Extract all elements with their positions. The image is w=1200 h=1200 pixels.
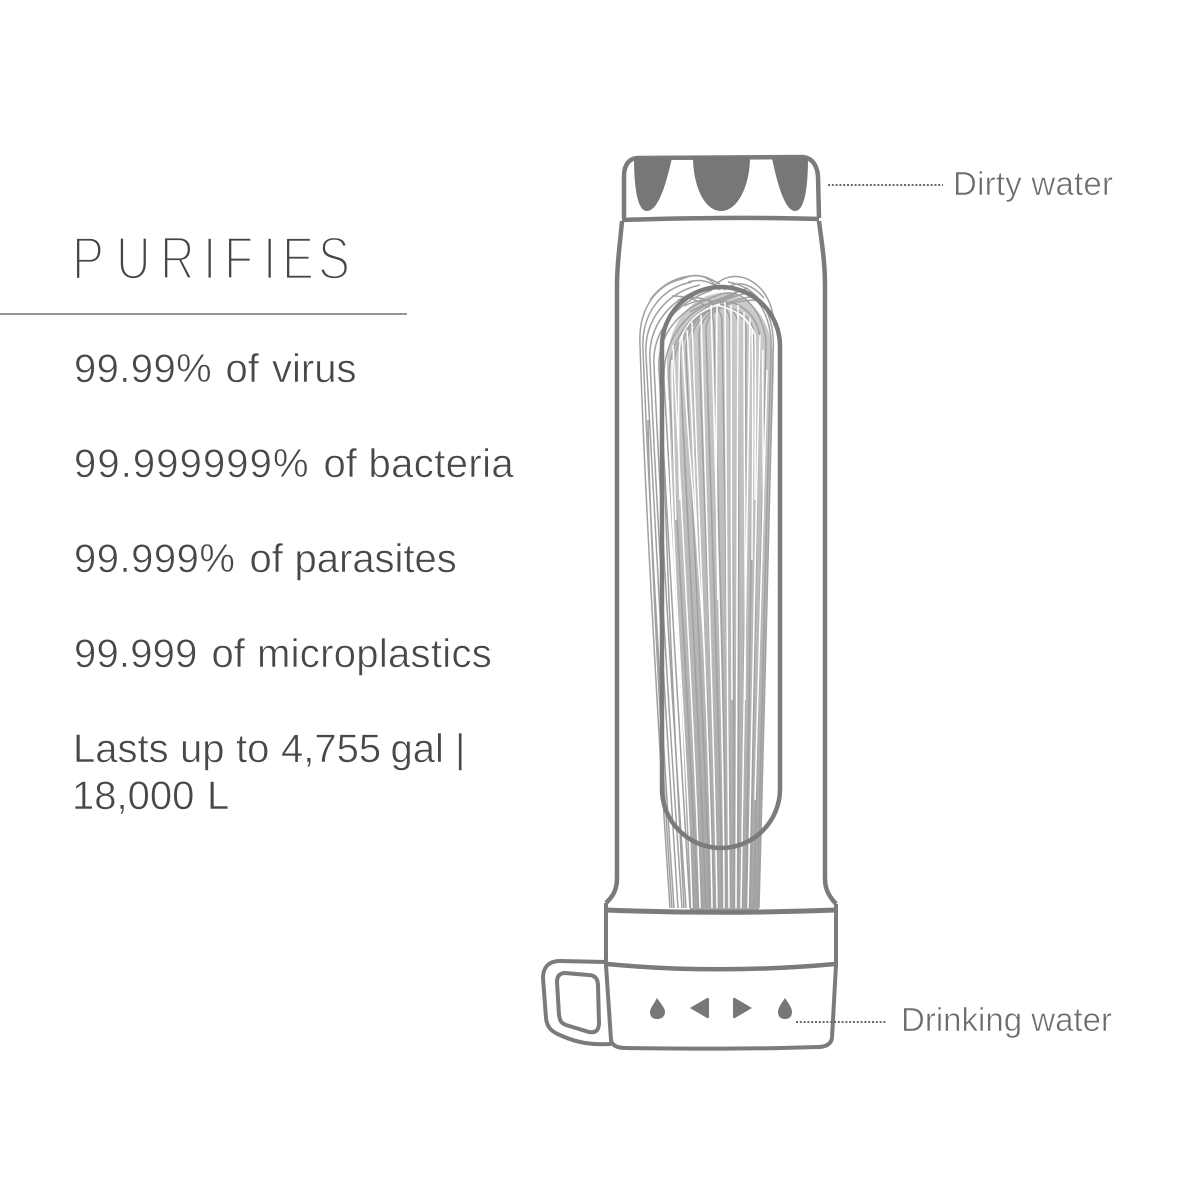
heading rule — [0, 313, 407, 315]
callout: dirty water: Dirty water — [953, 165, 1113, 202]
icon: water drop — [650, 998, 665, 1019]
claim: microplastics: microplastics — [257, 632, 492, 676]
claim: virus: 99.99% — [74, 347, 224, 391]
dirty water inlets — [634, 157, 808, 211]
bottle body outline — [606, 221, 836, 904]
claim: filter lifespan: up — [180, 727, 236, 771]
filter base outline — [606, 903, 836, 1049]
claim: filter lifespan: | — [455, 727, 465, 771]
claim: filter lifespan: to — [236, 727, 280, 771]
icon: water drop — [778, 998, 792, 1019]
claim: parasites: of — [250, 537, 294, 581]
collar line — [606, 910, 836, 912]
claim: microplastics: 99.999 — [74, 632, 209, 676]
cap base line — [622, 218, 819, 220]
carry loop — [543, 961, 611, 1044]
claim: filter lifespan in litres: 18,000 — [72, 774, 205, 818]
claim: bacteria: of — [324, 442, 368, 486]
icon: right arrow — [733, 998, 752, 1018]
claim: filter lifespan in litres: L — [207, 774, 229, 818]
claim: virus: of — [226, 347, 270, 391]
base band line — [607, 964, 835, 969]
base icons — [650, 998, 792, 1019]
callout: drinking water: Drinking water — [901, 1001, 1112, 1038]
claim: microplastics: of — [212, 632, 256, 676]
claim: filter lifespan: Lasts — [73, 727, 180, 771]
filter fibers — [640, 275, 774, 910]
claim: filter lifespan: gal — [390, 727, 455, 771]
claim: parasites: parasites — [294, 537, 457, 581]
claim: parasites: 99.999% — [74, 537, 247, 581]
claim: filter lifespan: 4,755 — [281, 727, 392, 771]
panel: purification claims — [0, 225, 514, 818]
top cap outline — [624, 157, 819, 218]
claim: virus: virus — [272, 347, 356, 391]
icon: left arrow — [690, 998, 709, 1018]
claim: bacteria: bacteria — [368, 442, 514, 486]
heading: purifies: PURIFIES — [72, 225, 350, 292]
illustration: water filter bottle — [543, 157, 836, 1049]
claim: bacteria: 99.999999% — [74, 442, 322, 486]
viewing window outline — [662, 287, 780, 848]
